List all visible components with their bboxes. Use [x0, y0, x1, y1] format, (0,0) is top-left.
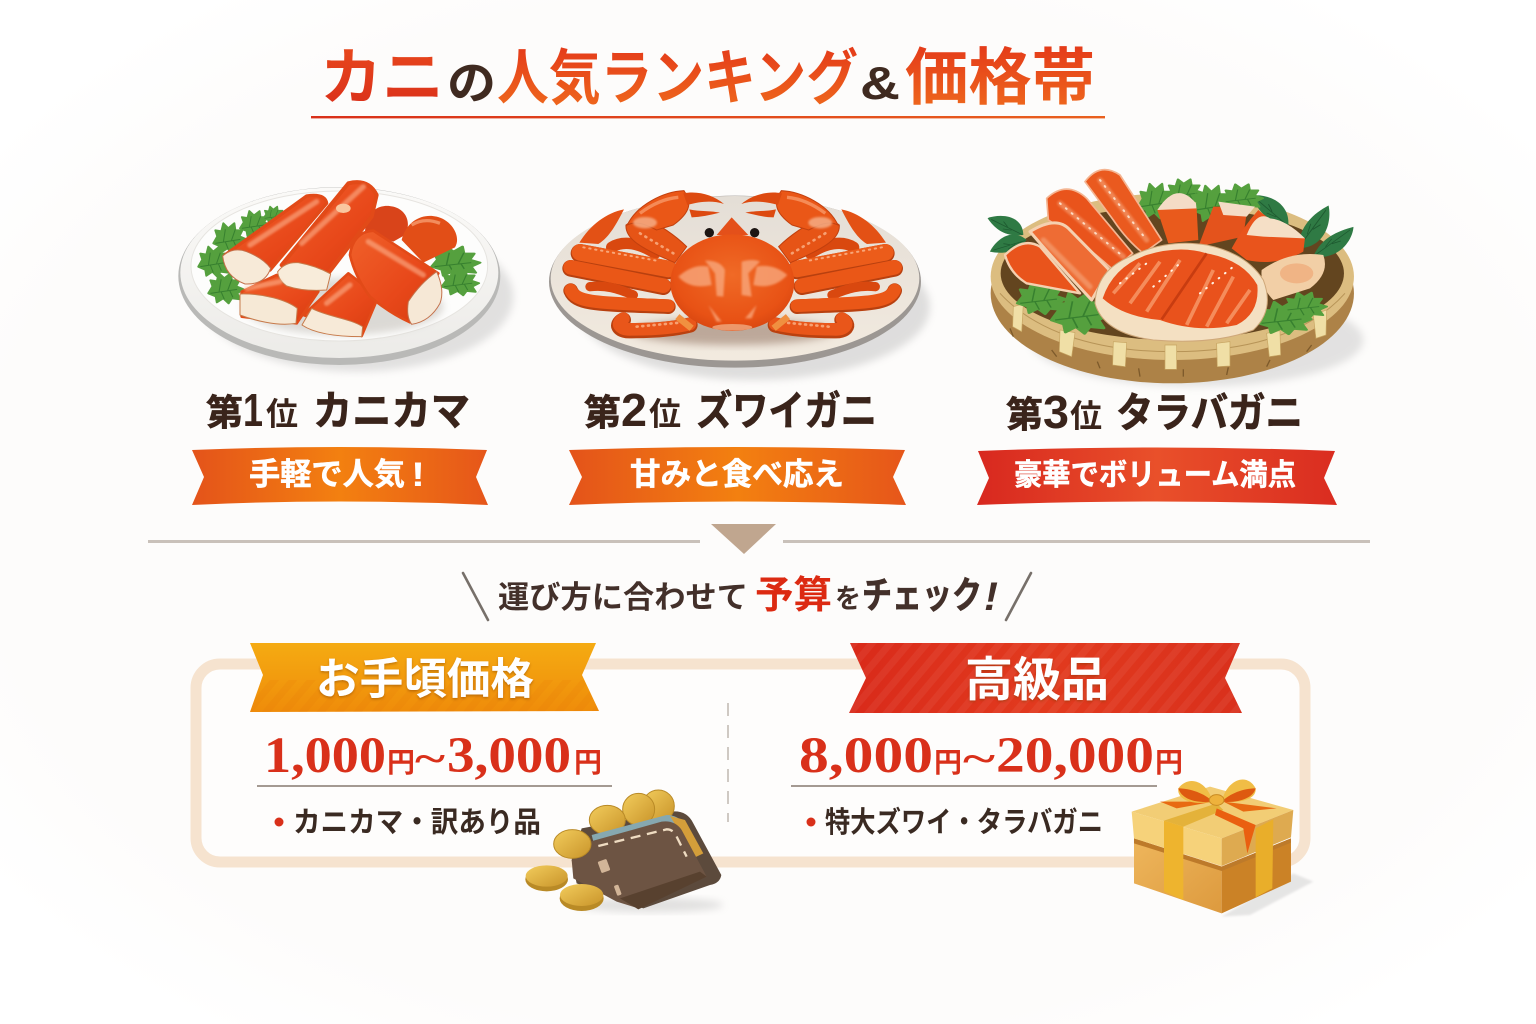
- crab stick pieces: [223, 182, 457, 337]
- rank 2 heading: 2: [621, 384, 647, 436]
- crab body: [670, 217, 794, 331]
- rank 1 heading: 位: [266, 396, 298, 432]
- rank 2 heading: ズワイガニ: [696, 388, 877, 434]
- crab shell: [1095, 243, 1267, 341]
- rank 3 heading: 位: [1070, 398, 1102, 434]
- panel: premium price: [791, 643, 1242, 839]
- premium price range: [799, 728, 1183, 784]
- title: &: [860, 57, 900, 109]
- title: [311, 44, 1105, 118]
- rank 2 ribbon: 甘みと食べ応え: [630, 457, 844, 492]
- rank 1 ribbon: [192, 447, 488, 505]
- rank 3 heading: タラバガニ: [1116, 390, 1303, 436]
- rank 1 ribbon: 手軽で人気: [249, 457, 405, 492]
- rank 3 heading: [1006, 386, 1303, 438]
- rank 2 ribbon: [569, 447, 906, 505]
- leaves: [988, 179, 1358, 334]
- gift ribbons: [1160, 780, 1277, 900]
- affordable price range: ~: [415, 736, 445, 781]
- rank 3 ribbon: 豪華でボリューム満点: [1014, 459, 1296, 492]
- affordable price range: 3,000: [447, 728, 571, 784]
- tagline: [463, 573, 1031, 620]
- rank 2 heading: 第: [584, 392, 621, 433]
- panel: rank 3 taraba crab: [977, 170, 1363, 505]
- basket bindings: [1013, 304, 1327, 369]
- affordable ribbon: [250, 643, 599, 712]
- tagline: 運び方に合わせて: [498, 580, 748, 615]
- rank 1 heading: [206, 384, 470, 436]
- affordable price range: 1,000: [264, 728, 386, 784]
- rank 1 heading: 1: [243, 384, 263, 436]
- divider with arrow: [148, 524, 1370, 554]
- rank 2 heading: [584, 384, 877, 436]
- illustration: plate of crab sticks: [178, 182, 513, 372]
- illustration: king crab in bamboo basket: [988, 170, 1363, 387]
- rank 1 ribbon: !: [411, 456, 425, 494]
- premium price range: 円: [934, 747, 962, 778]
- affordable items: カニカマ・訳あり品: [293, 807, 541, 839]
- garnish: parsley: [198, 206, 480, 303]
- crab legs and claws: [571, 191, 895, 331]
- title: カニ: [320, 44, 444, 113]
- title: 価格帯: [905, 44, 1095, 113]
- crab leg segments: [1005, 170, 1325, 300]
- premium ribbon: 高級品: [965, 653, 1109, 706]
- affordable price range: [264, 728, 602, 784]
- panel: rank 2 zuwai crab: [549, 191, 930, 505]
- premium price range: 20,000: [996, 728, 1154, 784]
- illustration: snow crab on plate: [549, 191, 930, 380]
- tagline: チェック: [862, 575, 982, 616]
- icon: wallet with coins: [525, 790, 723, 912]
- premium price range: 8,000: [799, 728, 933, 784]
- premium items: 特大ズワイ・タラバガニ: [825, 805, 1103, 839]
- tagline: 予算: [755, 575, 832, 617]
- tagline: を: [835, 584, 861, 614]
- arrow: down triangle: [711, 524, 776, 554]
- panel: price comparison frame: [196, 664, 1305, 862]
- tagline: !: [984, 575, 998, 619]
- rank 3 heading: 第: [1006, 394, 1043, 435]
- title: 人気ランキング: [497, 45, 858, 112]
- icon: gift box: [1132, 780, 1313, 917]
- premium ribbon: [849, 643, 1242, 713]
- rank 2 heading: 位: [649, 396, 681, 432]
- rank 1 heading: カニカマ: [313, 388, 470, 434]
- rank 1 heading: 第: [206, 392, 243, 433]
- title: の: [447, 57, 496, 109]
- affordable ribbon: お手頃価格: [316, 656, 534, 704]
- rank 3 heading: 3: [1043, 386, 1069, 438]
- premium price range: ~: [963, 736, 995, 781]
- affordable price range: 円: [574, 747, 602, 778]
- premium price range: 円: [1155, 747, 1183, 778]
- panel: rank 1 kanikama: [178, 182, 513, 505]
- panel: affordable price: [250, 643, 612, 839]
- center dashed divider: [727, 703, 729, 822]
- affordable price range: 円: [387, 747, 415, 778]
- rank 3 ribbon: [977, 448, 1337, 505]
